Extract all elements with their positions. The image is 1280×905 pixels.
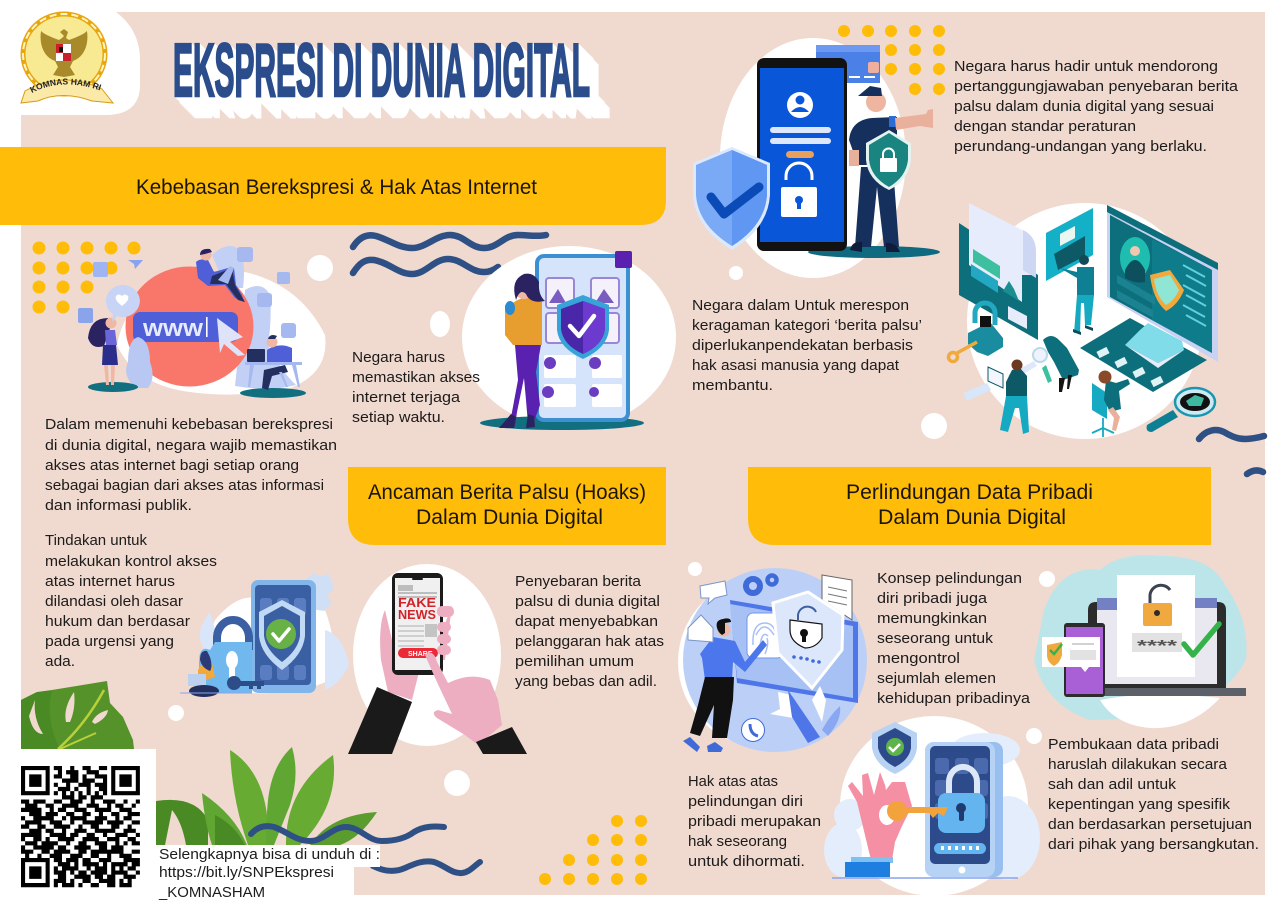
text: pembukaan data pribadi: dari pihak yang bersangkutan.	[1048, 836, 1259, 853]
text: hak atas pelindungan: pelindungan diri	[688, 793, 803, 810]
yellow dots: bottom	[539, 815, 647, 885]
plant leaves bottom	[156, 747, 377, 845]
banner: Kebebasan Berekspresi	[0, 147, 666, 225]
woman with magnifier	[1008, 336, 1079, 392]
text: download link: Selengkapnya bisa di unduh di :	[159, 846, 380, 863]
text: keragaman berita palsu: membantu.	[692, 377, 773, 394]
illustration: woman and phone with shield	[462, 246, 676, 430]
illustration: fake news phone and hands: FAKE	[398, 595, 436, 610]
text: akses internet	[352, 349, 480, 426]
text: pertanggungjawaban: Negara harus hadir untuk mendorong	[954, 58, 1218, 75]
banner: Ancaman Berita Palsu	[348, 467, 666, 545]
text: kontrol akses: melakukan kontrol akses	[45, 553, 217, 570]
text: konsep pelindungan: mengontrol	[877, 650, 960, 667]
seated woman	[1092, 370, 1130, 437]
text: kebebasan berekspresi: dan informasi publik.	[45, 497, 192, 514]
keyboard base	[1080, 318, 1207, 392]
logo: Komnas HAM emblem	[20, 12, 114, 104]
text: penyebaran berita palsu: pemilihan umum	[515, 653, 634, 670]
text: kebebasan berekspresi	[45, 416, 337, 514]
text: kontrol akses: atas internet harus	[45, 573, 175, 590]
text: akses internet: Negara harus	[352, 349, 445, 366]
text: pertanggungjawaban: palsu dalam dunia digital yang sesuai	[954, 98, 1214, 115]
text: hak atas pelindungan: pribadi merupakan	[688, 813, 821, 830]
text: pertanggungjawaban: perundang-undangan yang berlaku.	[954, 138, 1207, 155]
text: penyebaran berita palsu: dapat menyebabkan	[515, 613, 658, 630]
text: konsep pelindungan: sejumlah elemen	[877, 670, 996, 687]
illustration: police, phone and shield	[693, 38, 940, 278]
illustration: globe www: www	[142, 315, 203, 342]
text: konsep pelindungan: diri pribadi juga	[877, 590, 988, 607]
illustration: fake news phone and hands	[348, 564, 527, 754]
illustration: laptop password	[1034, 555, 1247, 728]
text: konsep pelindungan	[877, 570, 1031, 707]
text: keragaman berita palsu: diperlukanpendekatan berbasis	[692, 337, 913, 354]
small white bubbles	[168, 255, 1055, 796]
text: download link: _KOMNASHAM	[158, 884, 265, 901]
text: pertanggungjawaban: dengan standar peraturan	[954, 118, 1136, 135]
text: penyebaran berita palsu: Penyebaran berita	[515, 573, 642, 590]
text: akses internet: setiap waktu.	[352, 409, 445, 426]
magnifier	[1147, 388, 1215, 432]
text: konsep pelindungan: Konsep pelindungan	[877, 570, 1022, 587]
text: kebebasan berekspresi: Dalam memenuhi kebebasan berekspresi	[45, 416, 333, 433]
text: pembukaan data pribadi: sah dan adil untuk	[1048, 776, 1176, 793]
illustration: lock, phone and woman	[180, 573, 349, 697]
text: kontrol akses: hukum dan berdasar	[45, 613, 190, 630]
big monitor	[1107, 205, 1218, 362]
text: konsep pelindungan: memungkinkan	[877, 610, 987, 627]
text: hak atas pelindungan	[688, 773, 821, 870]
plant leaves left	[21, 681, 134, 749]
text: kontrol akses: ada.	[45, 653, 75, 670]
text: akses internet: internet terjaga	[352, 389, 461, 406]
banner: Kebebasan Berekspresi: Kebebasan Berekspresi & Hak Atas Internet	[136, 176, 537, 199]
text: konsep pelindungan: kehidupan pribadinya	[877, 690, 1031, 707]
text: pertanggungjawaban	[954, 58, 1239, 155]
text: pembukaan data pribadi: kepentingan yang spesifik	[1048, 796, 1230, 813]
man with laptop	[963, 360, 1029, 434]
text: penyebaran berita palsu	[515, 573, 664, 690]
yellow dots: top right	[838, 25, 945, 95]
text: pembukaan data pribadi: haruslah dilakukan secara	[1048, 756, 1228, 773]
banner: Perlindungan Data Pribadi: Perlindungan Data Pribadi	[846, 481, 1093, 504]
text: kontrol akses	[45, 532, 217, 670]
text: pembukaan data pribadi	[1048, 736, 1259, 853]
text: pembukaan data pribadi: Pembukaan data pribadi	[1048, 736, 1219, 753]
illustration: laptop password: ****	[1137, 638, 1178, 655]
text: EKSPRESI DI DUNIA DIGITAL	[173, 28, 590, 112]
illustration: fake news phone and hands: NEWS	[398, 607, 436, 622]
text: kebebasan berekspresi: akses atas internet bagi setiap orang	[45, 457, 299, 474]
document folder	[959, 203, 1038, 340]
wave decorations upper	[353, 235, 1264, 474]
banner: Perlindungan Data Pribadi: Dalam Dunia Digital	[878, 506, 1066, 529]
text: penyebaran berita palsu: pelanggaran hak atas	[515, 633, 664, 650]
text: pembukaan data pribadi: dan berdasarkan persetujuan	[1048, 816, 1252, 833]
text: pertanggungjawaban: pertanggungjawaban penyebaran berita	[954, 78, 1239, 95]
text: kebebasan berekspresi: sebagai bagian dari akses atas informasi	[45, 477, 324, 494]
yellow dots: left	[32, 242, 140, 314]
banner: Ancaman Berita Palsu: Ancaman Berita Palsu (Hoaks)	[368, 481, 646, 504]
banner: Perlindungan Data Pribadi	[748, 467, 1211, 545]
text: kontrol akses: dilandasi oleh dasar	[45, 593, 183, 610]
illustration: person with fingerprint and shield	[678, 568, 867, 752]
text: hak atas pelindungan: hak seseorang	[688, 833, 787, 850]
illustration: globe www	[78, 246, 326, 398]
text: download link	[158, 846, 380, 901]
text: download link: https://bit.ly/SNPEkspresi	[159, 864, 334, 881]
text: konsep pelindungan: seseorang untuk	[877, 630, 993, 647]
text: keragaman berita palsu: Negara dalam Untuk merespon	[692, 297, 909, 314]
QR code	[21, 766, 140, 887]
text: hak atas pelindungan: untuk dihormati.	[688, 853, 805, 870]
text: hak atas pelindungan: Hak atas atas	[688, 773, 778, 790]
text: kontrol akses: Tindakan untuk	[45, 532, 147, 549]
text: keragaman berita palsu: hak asasi manusia yang dapat	[692, 357, 900, 374]
logo plate	[21, 12, 140, 115]
keypad screen and person	[1046, 208, 1094, 335]
lock and key	[948, 303, 1003, 362]
text: keragaman berita palsu	[692, 297, 922, 394]
wave decorations lower	[251, 826, 480, 873]
logo: Komnas HAM emblem: KOMNAS HAM RI	[30, 78, 102, 93]
text: akses internet: memastikan akses	[352, 369, 480, 386]
text: kebebasan berekspresi: di dunia digital, negara wajib memastikan	[45, 437, 337, 454]
illustration: hand with key and phone lock	[824, 716, 1040, 896]
banner: Ancaman Berita Palsu: Dalam Dunia Digital	[416, 506, 603, 529]
illustration: isometric data office	[948, 203, 1218, 439]
text: keragaman berita palsu: keragaman kategori ‘berita palsu’	[692, 317, 922, 334]
QR block background	[21, 749, 380, 895]
illustration: fake news phone and hands: SHARE	[408, 651, 433, 658]
text: kontrol akses: pada urgensi yang	[45, 633, 174, 650]
text: penyebaran berita palsu: palsu di dunia digital	[515, 593, 660, 610]
text: penyebaran berita palsu: yang bebas dan adil.	[515, 673, 657, 690]
